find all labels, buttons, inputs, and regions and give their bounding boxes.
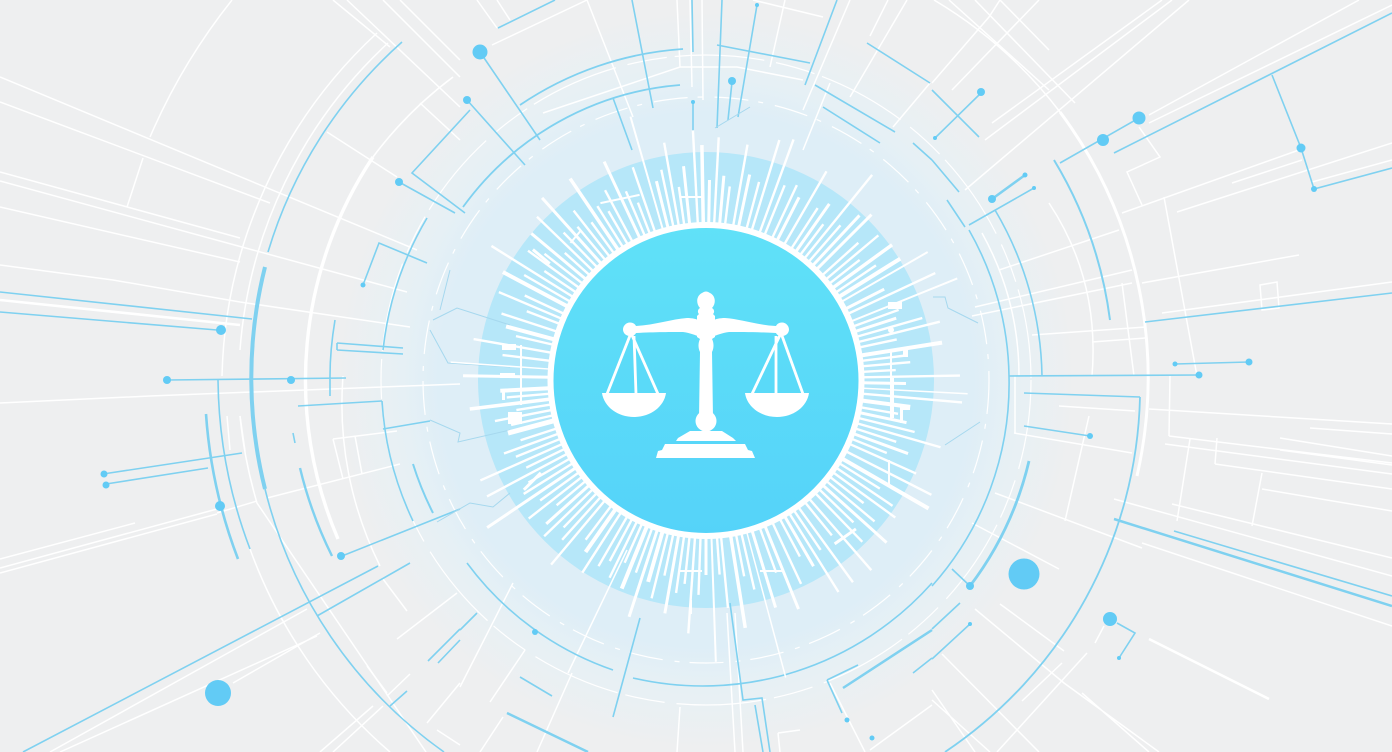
bottom blue lines: [390, 603, 970, 752]
icon: post and finial: [697, 292, 715, 418]
thick left white lines: [0, 300, 240, 325]
radial ticks: [451, 117, 968, 678]
right blue lines: [932, 13, 1392, 658]
fine connectors on halo: [430, 107, 980, 522]
left white lines: [0, 0, 460, 752]
thick white line: [1149, 639, 1269, 699]
icon: scales of justice: [602, 292, 809, 458]
icon: pan strings: [607, 333, 803, 394]
icon: lower base: [656, 444, 755, 458]
icon: beam: [623, 318, 789, 337]
left blue lines: [0, 52, 540, 752]
top blue lines: [498, 0, 932, 160]
top white lines: [477, 0, 930, 150]
bottom white lines: [460, 550, 932, 752]
middle disc: [478, 152, 934, 608]
icon: left pan: [602, 393, 666, 417]
icon: upper base: [676, 431, 736, 441]
right white lines: [932, 0, 1392, 376]
white ring arcs: [222, 33, 377, 376]
blue ring arcs: [268, 42, 402, 252]
lower right white lines: [932, 376, 1392, 752]
icon: lower knob: [696, 410, 716, 432]
thick blue strokes: [507, 175, 1392, 752]
outer halo disc: [338, 12, 1074, 748]
central circle: [550, 225, 862, 536]
icon: right pan: [745, 393, 809, 417]
tick cross-links and blocks: [500, 194, 910, 614]
